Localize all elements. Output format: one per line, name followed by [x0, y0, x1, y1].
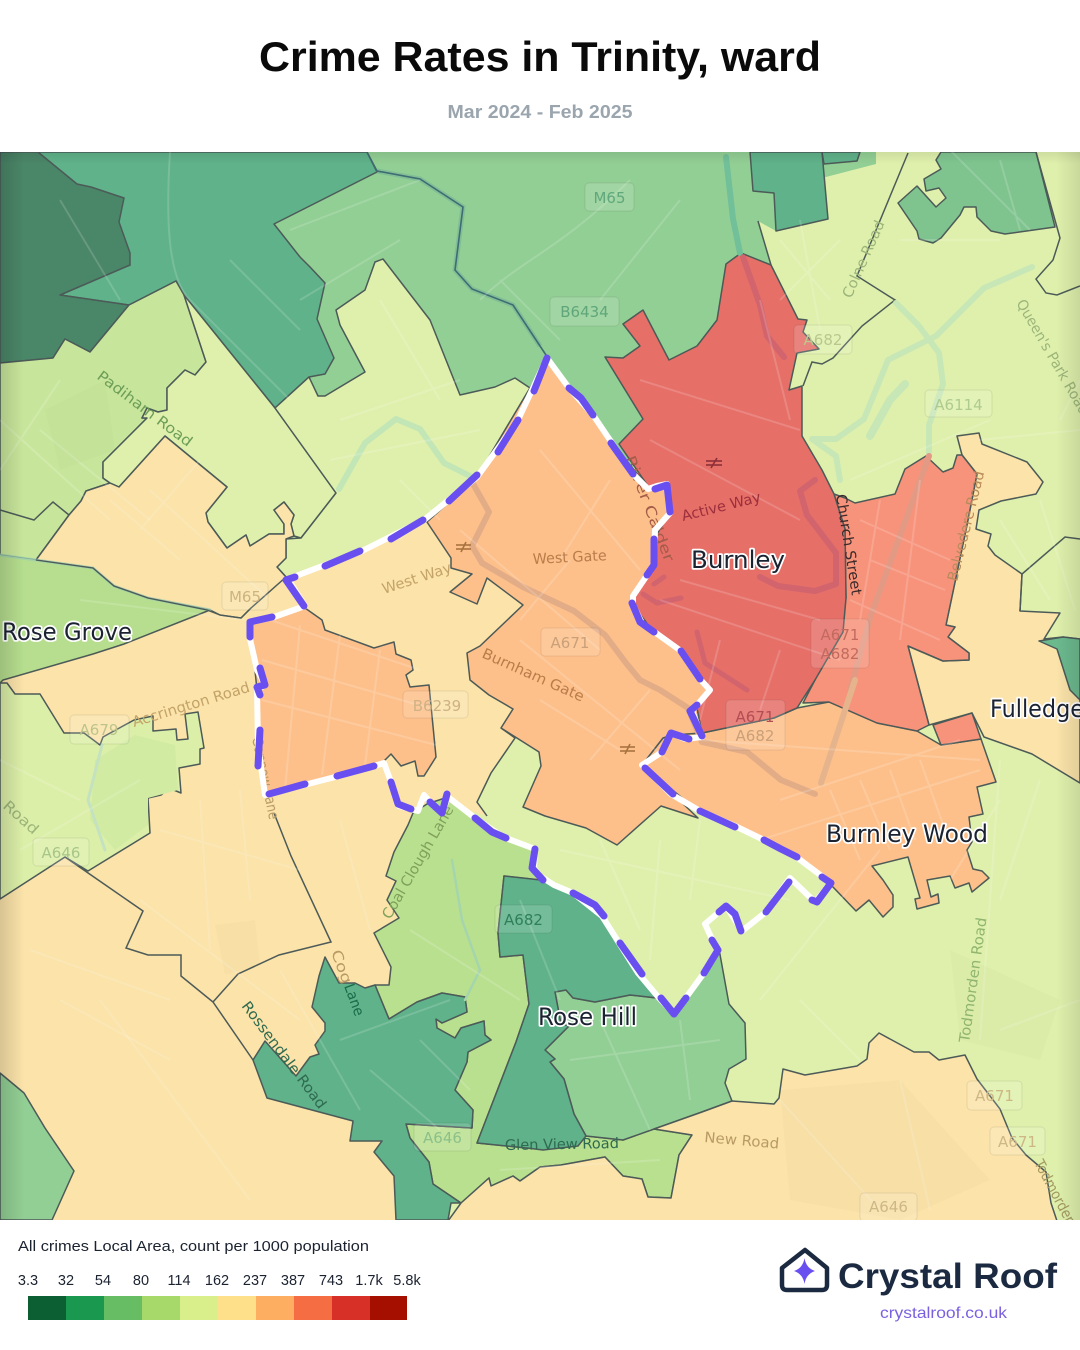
street name: Padiham Road: Padiham Road [94, 368, 195, 450]
legend value labels: 162 [205, 1273, 229, 1289]
legend value labels: 1.7k [355, 1273, 383, 1289]
road label: B6239: B6239 [413, 697, 461, 715]
legend value labels: 54 [95, 1273, 111, 1289]
area: north green block [750, 152, 828, 231]
road label: M65 west [222, 582, 268, 610]
street name: Accrington Road: Accrington Road [130, 680, 252, 731]
street name: Burnham Gate: Burnham Gate [479, 646, 586, 705]
road label: A671 A682 east: A671 [821, 626, 859, 644]
road label: B6434: B6434 [560, 303, 609, 321]
road label: A646 west: A646 [42, 844, 80, 862]
icon: railway station Burnley [706, 458, 722, 468]
title: Crime Rates in Trinity, ward [259, 33, 821, 80]
street name: Colne Road: Colne Road [840, 218, 888, 301]
road label: A679 [70, 715, 129, 744]
road label: A671 A682 east: A682 [821, 645, 859, 663]
road label: A671 far south-east [990, 1127, 1045, 1155]
road label: A646 west [33, 838, 89, 866]
choropleth map [0, 150, 1080, 1228]
road label: A682 Rose Hill [495, 905, 552, 933]
icon: railway station south [620, 744, 635, 754]
street name: Todmorden Road: Todmorden Road [957, 917, 990, 1045]
street name: Gannow Lane: Gannow Lane [248, 736, 281, 821]
boundary lines [0, 610, 210, 683]
street network [0, 150, 1080, 1210]
road label: M65 north: M65 [593, 189, 626, 207]
area: yellow Rose Grove [36, 436, 294, 618]
area: yellow east [908, 433, 1080, 783]
area: small north green [822, 152, 860, 164]
icon: railway station west [456, 542, 471, 552]
legend value labels: 3.3 [18, 1273, 38, 1289]
road label: A682 Rose Hill: A682 [504, 911, 543, 929]
street name: West Gate: West Gate [532, 548, 607, 568]
street name: Road far west: Road [0, 798, 41, 838]
legend colour scale [28, 1296, 407, 1320]
street name: Rossendale Road: Rossendale Road [238, 999, 329, 1112]
road label: A646 bottom: A646 [869, 1198, 908, 1216]
north-east boundary lines [803, 153, 908, 386]
area: lime pocket [275, 259, 530, 579]
area: yellow west [0, 522, 523, 1220]
road label: B6434 [550, 297, 619, 326]
road label: A671 centre: A671 [551, 634, 589, 652]
area: east green patch [1039, 637, 1080, 700]
road label: A6114: A6114 [934, 396, 983, 414]
street name: Lane: Lane [340, 982, 367, 1018]
area: Rose Grove south green [0, 555, 210, 683]
street name: River Calder: River Calder [621, 454, 676, 564]
street name: Cog Lane: Cog [327, 948, 354, 986]
legend value labels: 5.8k [393, 1273, 421, 1289]
area: Coal Clough light green [374, 797, 692, 1203]
street name: Glen View Road: Glen View Road [505, 1136, 619, 1154]
map edge shading [0, 152, 1080, 1220]
legend value labels: 114 [167, 1273, 191, 1289]
north river line [377, 171, 540, 346]
road label: A671 centre [541, 628, 600, 656]
road label: M65 west: M65 [229, 588, 261, 606]
subtitle: date range: Mar 2024 - Feb 2025 [448, 102, 632, 122]
area: green patch west [90, 735, 178, 850]
area tints [45, 380, 1060, 1220]
road label: A671 A682 south [726, 700, 785, 750]
road label: A682 north: A682 [804, 331, 842, 349]
street name: New Road: New Road [704, 1130, 780, 1153]
place label: Rose Grove: Rose Grove [2, 618, 132, 646]
icon: house with star [782, 1250, 827, 1290]
street name: Coal Clough Lane: Coal Clough Lane [380, 803, 458, 922]
road label: A671 A682 south: A682 [736, 727, 774, 745]
logo url: crystalroof.co.uk [880, 1305, 1008, 1322]
area: small salmon box [933, 713, 981, 745]
area: lime west [0, 683, 204, 899]
legend [18, 1239, 421, 1320]
logo wordmark: Crystal Roof [838, 1257, 1057, 1296]
legend value labels [18, 1273, 421, 1289]
road label: A646 south [414, 1123, 471, 1151]
area: Padiham Road light green [0, 281, 206, 560]
area: south-west mid green [253, 957, 491, 1220]
area: north-east green patch [898, 152, 1055, 243]
area: south-west green [0, 1073, 74, 1220]
area: central orange [427, 358, 710, 845]
area: Burnley Wood north salmon [803, 455, 977, 731]
street name: Active Way: Active Way [680, 490, 763, 525]
road label: A671 south-east: A671 [975, 1087, 1014, 1105]
road label: A6114 [925, 390, 992, 417]
road label: A682 north [794, 325, 852, 354]
area: west block orange [250, 608, 436, 795]
rivers and canals [0, 157, 1032, 1000]
area: north-west dark green [0, 152, 130, 363]
street name: Belvedere Road: Belvedere Road [945, 469, 988, 583]
logo: Crystal Roof [782, 1250, 1057, 1322]
road label: M65 north [585, 183, 634, 211]
road label: A671 A682 south: A671 [736, 708, 774, 726]
area: north light green [275, 152, 876, 466]
area: yellow south [448, 1033, 1057, 1221]
road label: A671 A682 east [811, 619, 869, 668]
road label: A671 far south-east: A671 [998, 1133, 1037, 1151]
legend title: All crimes Local Area, count per 1000 population [18, 1239, 369, 1255]
place label: Burnley: Burnley [691, 546, 785, 574]
road label: A679: A679 [80, 721, 118, 739]
area: Rose Hill west mid green [477, 876, 657, 1150]
legend value labels: 237 [243, 1273, 267, 1289]
area: south-east orange [642, 702, 996, 917]
legend value labels: 387 [281, 1273, 305, 1289]
road label: A646 bottom [860, 1193, 917, 1221]
area: lime west of M65 line [103, 295, 336, 548]
legend value labels: 80 [133, 1273, 149, 1289]
area: Burnley centre red [605, 253, 846, 733]
road label: A671 south-east [967, 1081, 1022, 1110]
legend value labels: 32 [58, 1273, 74, 1289]
place label: Rose Hill: Rose Hill [538, 1003, 637, 1031]
street name: West Way: West Way [380, 560, 454, 598]
place label: Burnley Wood: Burnley Wood [826, 820, 988, 848]
legend value labels: 743 [319, 1273, 343, 1289]
area: Rose Hill east light green [545, 949, 746, 1140]
road label: B6239 [403, 691, 468, 718]
area: north-west mid green [38, 152, 377, 408]
road label: A646 south: A646 [423, 1129, 462, 1147]
ward boundary: Trinity [250, 358, 831, 1014]
road labels [0, 183, 1080, 1228]
street name: Church Street: Church Street [832, 493, 864, 597]
